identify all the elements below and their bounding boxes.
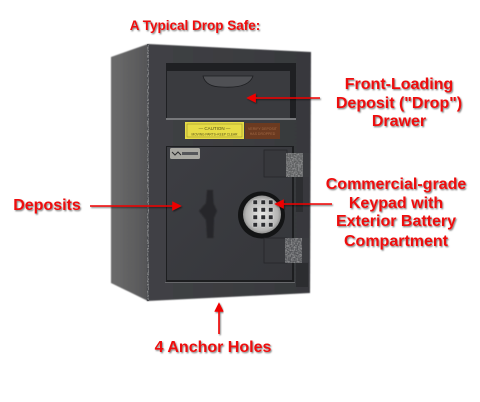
brand badge — [170, 148, 200, 159]
arrow: anchor holes — [216, 304, 222, 334]
label: deposits: Deposits — [13, 197, 81, 214]
arrow: drawer — [248, 94, 320, 102]
caution label: — CAUTION — — [199, 126, 231, 131]
label: drawer: Deposit ("Drop") — [336, 95, 462, 112]
brown warning label: VERIFY DEPOSIT — [248, 127, 278, 131]
safe illustration — [111, 44, 311, 301]
door handle — [199, 190, 217, 238]
label: drawer: Front-Loading — [345, 76, 453, 93]
label: keypad: Commercial-grade — [326, 176, 466, 193]
drawer handle — [203, 76, 253, 87]
label: keypad — [326, 176, 466, 250]
brown warning label: HAS DROPPED — [250, 132, 276, 136]
top hinge — [264, 150, 309, 212]
caution label: MOVING PARTS–KEEP CLEAR — [192, 132, 238, 136]
safe side panel — [111, 44, 148, 301]
label: drawer: Drawer — [372, 113, 426, 130]
label: drawer — [336, 76, 462, 130]
bottom hinge — [264, 238, 309, 287]
deposit drawer opening — [166, 63, 296, 120]
caution label — [185, 122, 244, 139]
label: anchor holes: 4 Anchor Holes — [155, 339, 271, 356]
safe front body — [147, 44, 311, 301]
title: A Typical Drop Safe: — [130, 18, 260, 33]
safe door — [165, 146, 295, 283]
electronic keypad — [238, 192, 285, 238]
brown warning label — [245, 123, 280, 139]
label: keypad: Exterior Battery — [336, 213, 456, 230]
arrow: deposits — [90, 202, 180, 210]
label: keypad: Keypad with — [349, 195, 443, 212]
label: keypad: Compartment — [344, 233, 449, 250]
arrow: keypad — [276, 200, 332, 208]
